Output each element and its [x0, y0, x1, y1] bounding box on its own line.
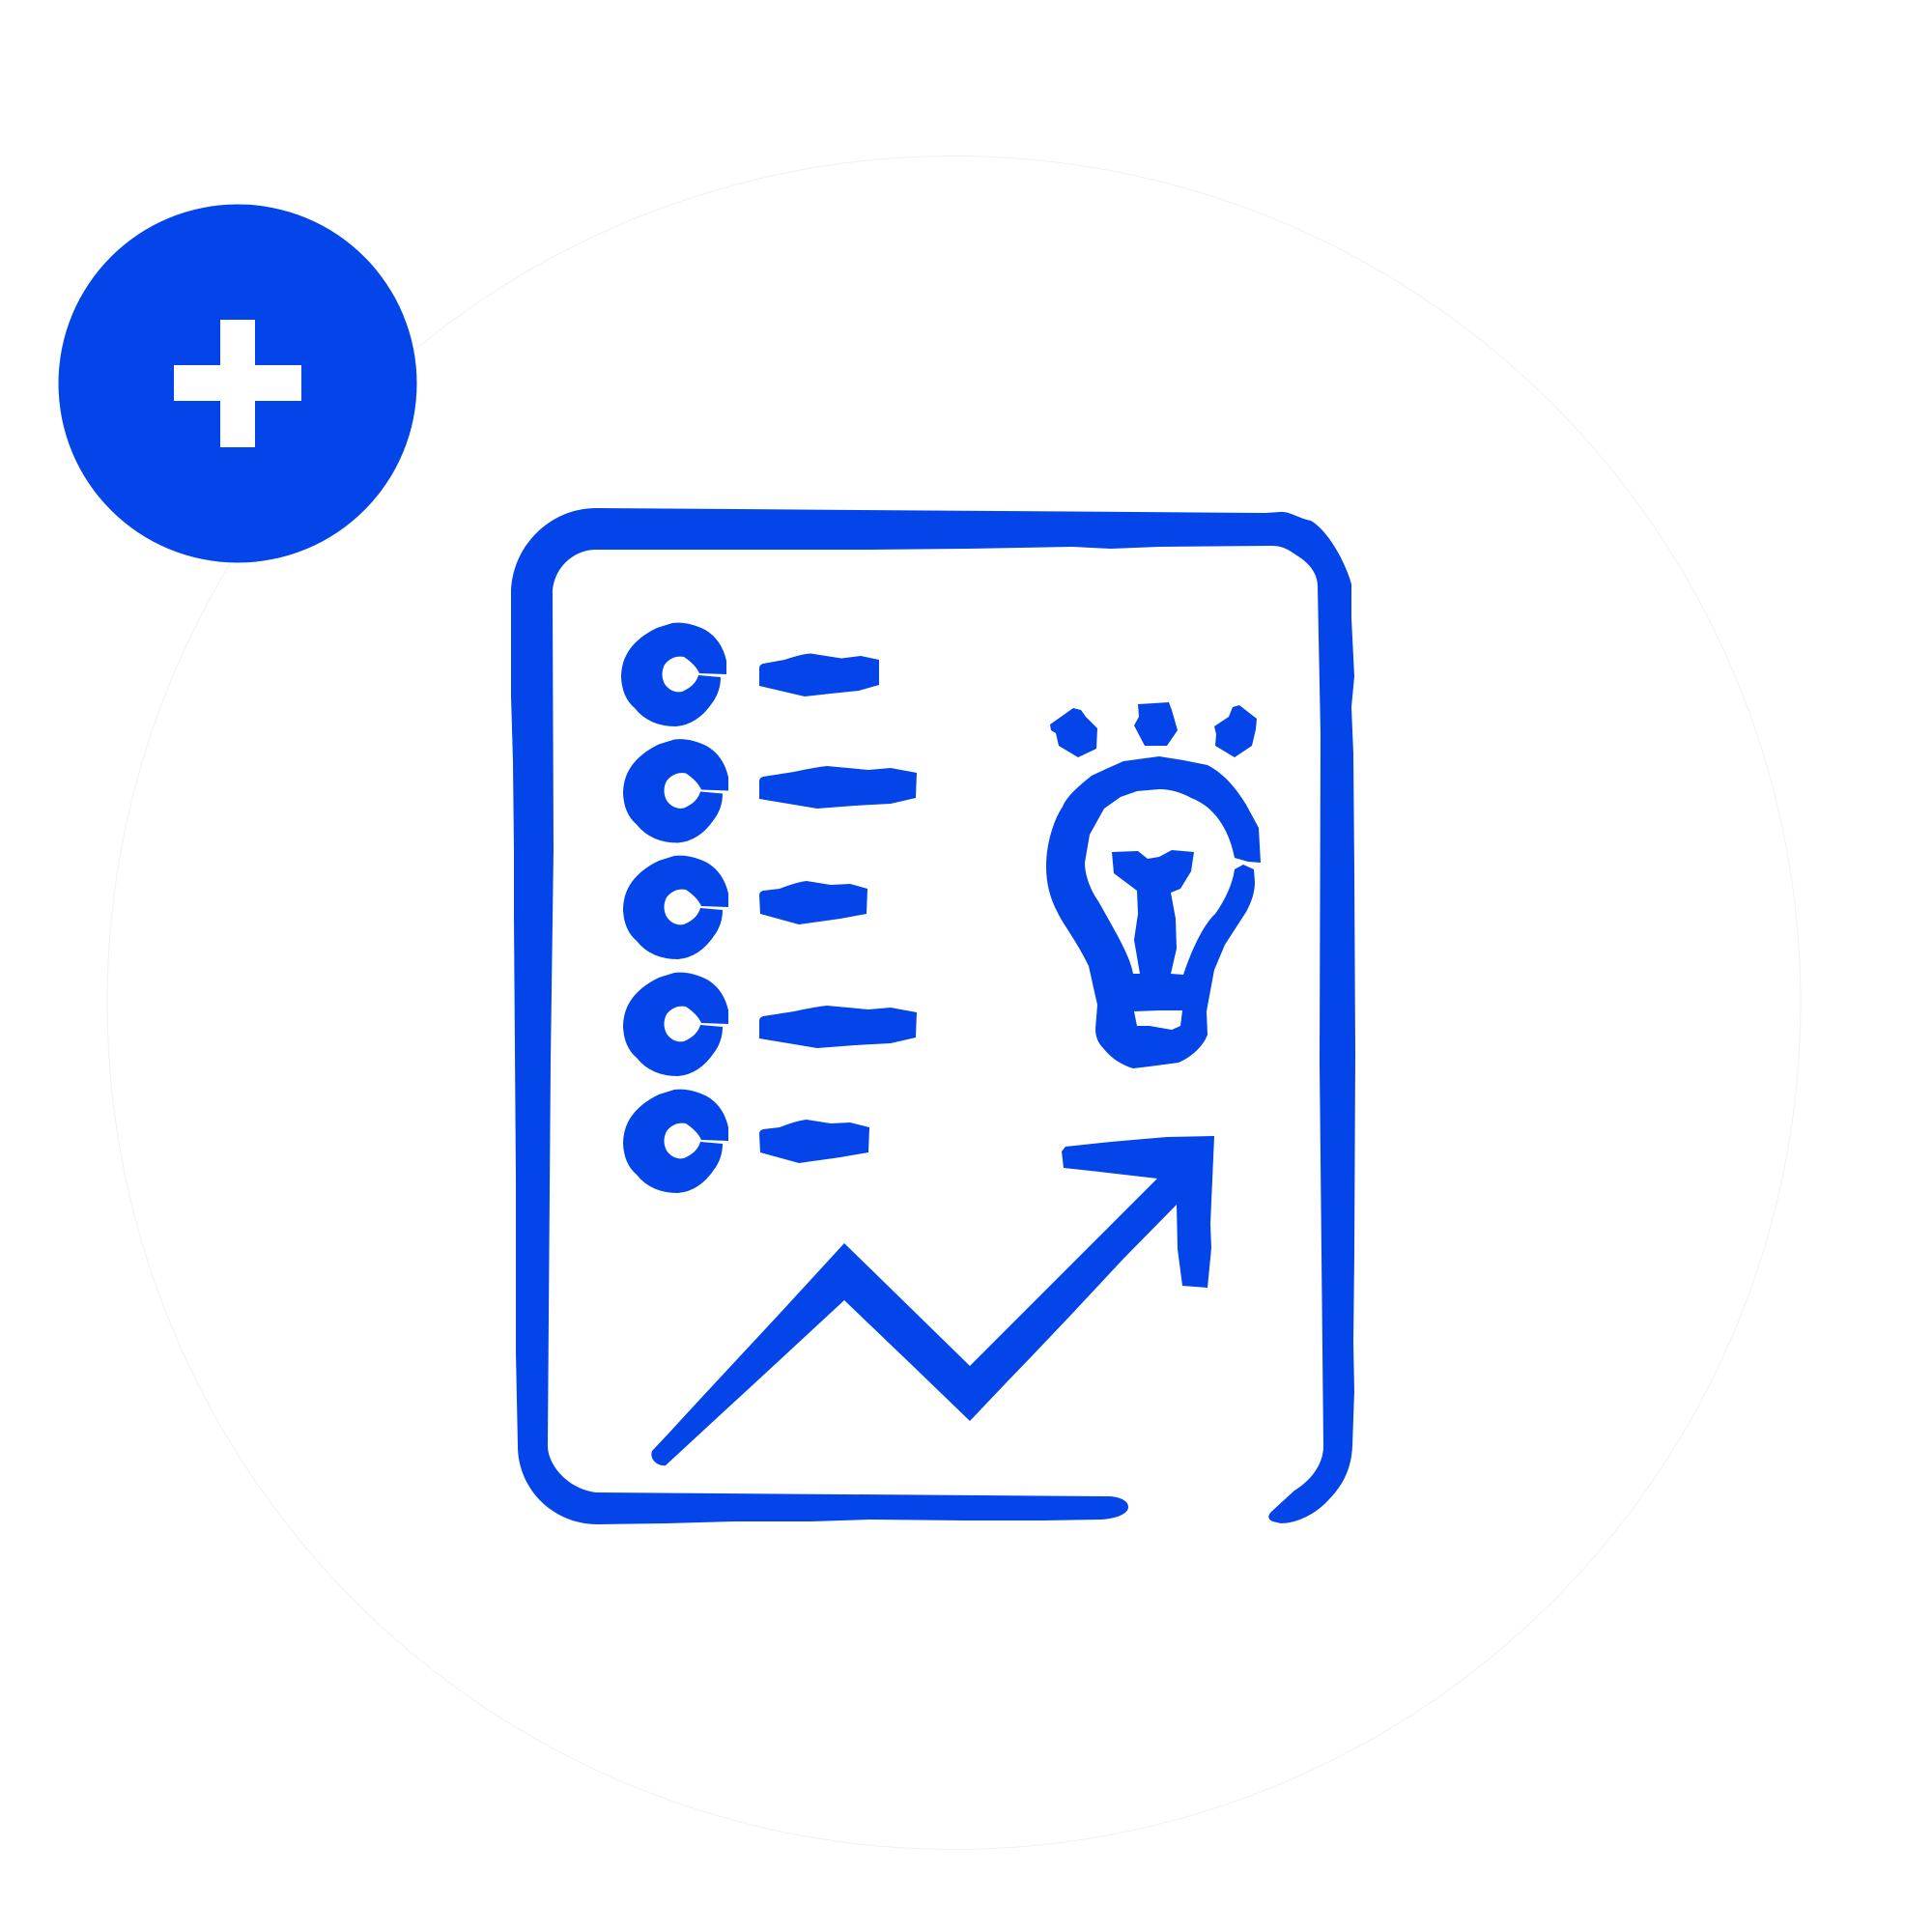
bulb outline with filament — [1046, 756, 1261, 1068]
text bar 3 — [759, 881, 867, 924]
ring bullet 1 — [621, 623, 726, 726]
list item 4 — [623, 973, 917, 1076]
icon: light bulb with sparks — [1046, 702, 1261, 1068]
text bar 5 — [759, 1120, 869, 1163]
text bar 1 — [759, 653, 879, 696]
text bar 2 — [759, 766, 917, 809]
badge disc — [58, 205, 417, 562]
list item 1 — [621, 623, 879, 726]
spark middle — [1134, 702, 1178, 746]
document frame: hand-drawn outline — [511, 508, 1355, 1524]
list item 2 — [623, 739, 917, 842]
spark right — [1214, 705, 1257, 757]
spark left — [1050, 708, 1097, 757]
plus badge — [58, 205, 417, 562]
list item 3 — [623, 856, 867, 959]
ring bullet 5 — [623, 1090, 728, 1193]
text bar 4 — [759, 1006, 917, 1048]
list item 5 — [623, 1090, 869, 1193]
plus sign — [174, 320, 301, 447]
background circle outline — [107, 156, 1801, 1849]
bulb socket window — [1134, 1010, 1182, 1030]
ring bullet 3 — [623, 856, 728, 959]
checklist: five rings with text bars — [621, 623, 917, 1193]
arrow: rising zigzag trend — [651, 1136, 1214, 1465]
ring bullet 4 — [623, 973, 728, 1076]
ring bullet 2 — [623, 739, 728, 842]
